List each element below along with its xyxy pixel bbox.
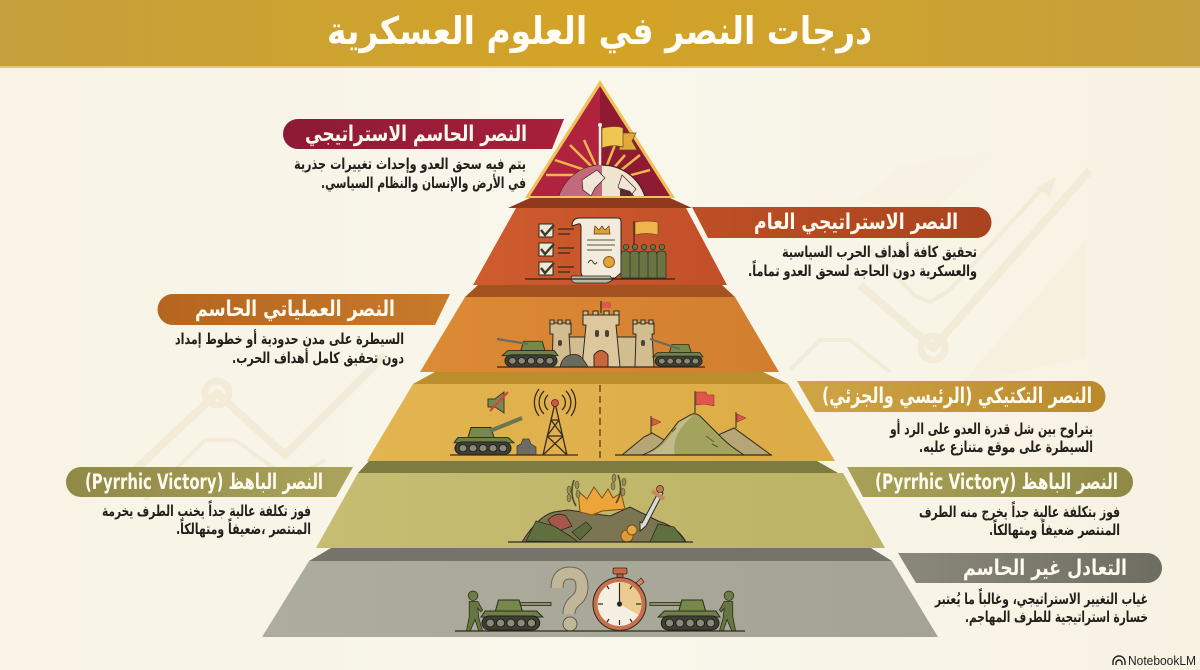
panel: pyrrhic victory (right): النصر الباهظ (Pyrrhic Victory) bbox=[875, 470, 1118, 495]
panel: tactical victory: السيطرة على موقع متنازع عليه. bbox=[919, 438, 1093, 456]
background chart motif bbox=[135, 150, 1090, 500]
icon: castle and tanks bbox=[497, 301, 705, 367]
tier 4: tactical bbox=[367, 372, 835, 461]
NotebookLM watermark: NotebookLM bbox=[1128, 654, 1196, 668]
panel: general strategic victory: تحقيق كافة أهداف الحرب السياسية bbox=[782, 242, 977, 261]
pyramid bbox=[262, 80, 938, 637]
tier 6: stalemate bbox=[262, 548, 938, 637]
panel: indecisive draw bbox=[898, 553, 1162, 626]
tier 5: pyrrhic bbox=[316, 461, 885, 548]
icon: stalemate tanks and stopwatch bbox=[455, 568, 745, 631]
panel: general strategic victory: النصر الاستراتيجي العام bbox=[754, 210, 958, 235]
panel: decisive operational victory bbox=[158, 294, 450, 367]
icon: checklist, treaty and troops bbox=[525, 218, 675, 283]
panel: decisive operational victory: السيطرة على مدن حدودية أو خطوط إمداد bbox=[175, 329, 404, 348]
panel: general strategic victory: والعسكرية دون الحاجة لسحق العدو تماماً. bbox=[748, 260, 977, 280]
panel: decisive strategic victory: في الأرض والإنسان والنظام السياسي. bbox=[321, 174, 526, 192]
panel: decisive strategic victory bbox=[283, 119, 564, 192]
panel: general strategic victory bbox=[692, 207, 991, 280]
panel: decisive strategic victory: النصر الحاسم الاستراتيجي bbox=[305, 122, 527, 147]
icon: broken crown on battlefield bbox=[508, 474, 693, 542]
tier 1: apex bbox=[525, 80, 675, 198]
panel: pyrrhic victory (right): فوز بتكلفة عالية جداً يخرج منه الطرف bbox=[919, 501, 1120, 521]
panel: tactical victory: يتراوح بين شل قدرة العدو على الرد أو bbox=[889, 419, 1093, 438]
title: درجات النصر في العلوم العسكرية bbox=[327, 9, 872, 54]
panel: indecisive draw: التعادل غير الحاسم bbox=[963, 556, 1127, 581]
panel: decisive strategic victory: يتم فيه سحق العدو وإحداث تغييرات جذرية bbox=[294, 155, 526, 173]
panel: decisive operational victory: النصر العملياتي الحاسم bbox=[195, 297, 395, 322]
header band bbox=[0, 0, 1200, 68]
panel: tactical victory bbox=[797, 381, 1106, 456]
panel: tactical victory: النصر التكتيكي (الرئيسي والجزئي) bbox=[822, 384, 1092, 409]
panel: pyrrhic victory (right) bbox=[847, 467, 1133, 539]
panel: pyrrhic victory (right): المنتصر ضعيفاً ومتهالكاً. bbox=[989, 519, 1120, 539]
tier 3: operational bbox=[420, 285, 779, 372]
panel: pyrrhic victory (left): النصر الباهظ (Pyrrhic Victory) bbox=[85, 470, 323, 495]
divider bbox=[599, 385, 601, 461]
icon: contested hills bbox=[615, 391, 772, 455]
panel: pyrrhic victory (left): فوز تكلفة عالية جداً يخنب الطرف يخرمة bbox=[102, 500, 311, 520]
tier 2: general strategic bbox=[473, 198, 727, 285]
panel: pyrrhic victory (left) bbox=[66, 467, 353, 538]
icon: paralysed tank and tower bbox=[450, 389, 578, 455]
panel: decisive operational victory: دون تحقيق كامل أهداف الحرب. bbox=[232, 348, 404, 367]
icon: flag on globe bbox=[546, 140, 650, 196]
panel: pyrrhic victory (left): المنتصر ،ضعيفاً ومتهالكاً. bbox=[176, 518, 311, 538]
